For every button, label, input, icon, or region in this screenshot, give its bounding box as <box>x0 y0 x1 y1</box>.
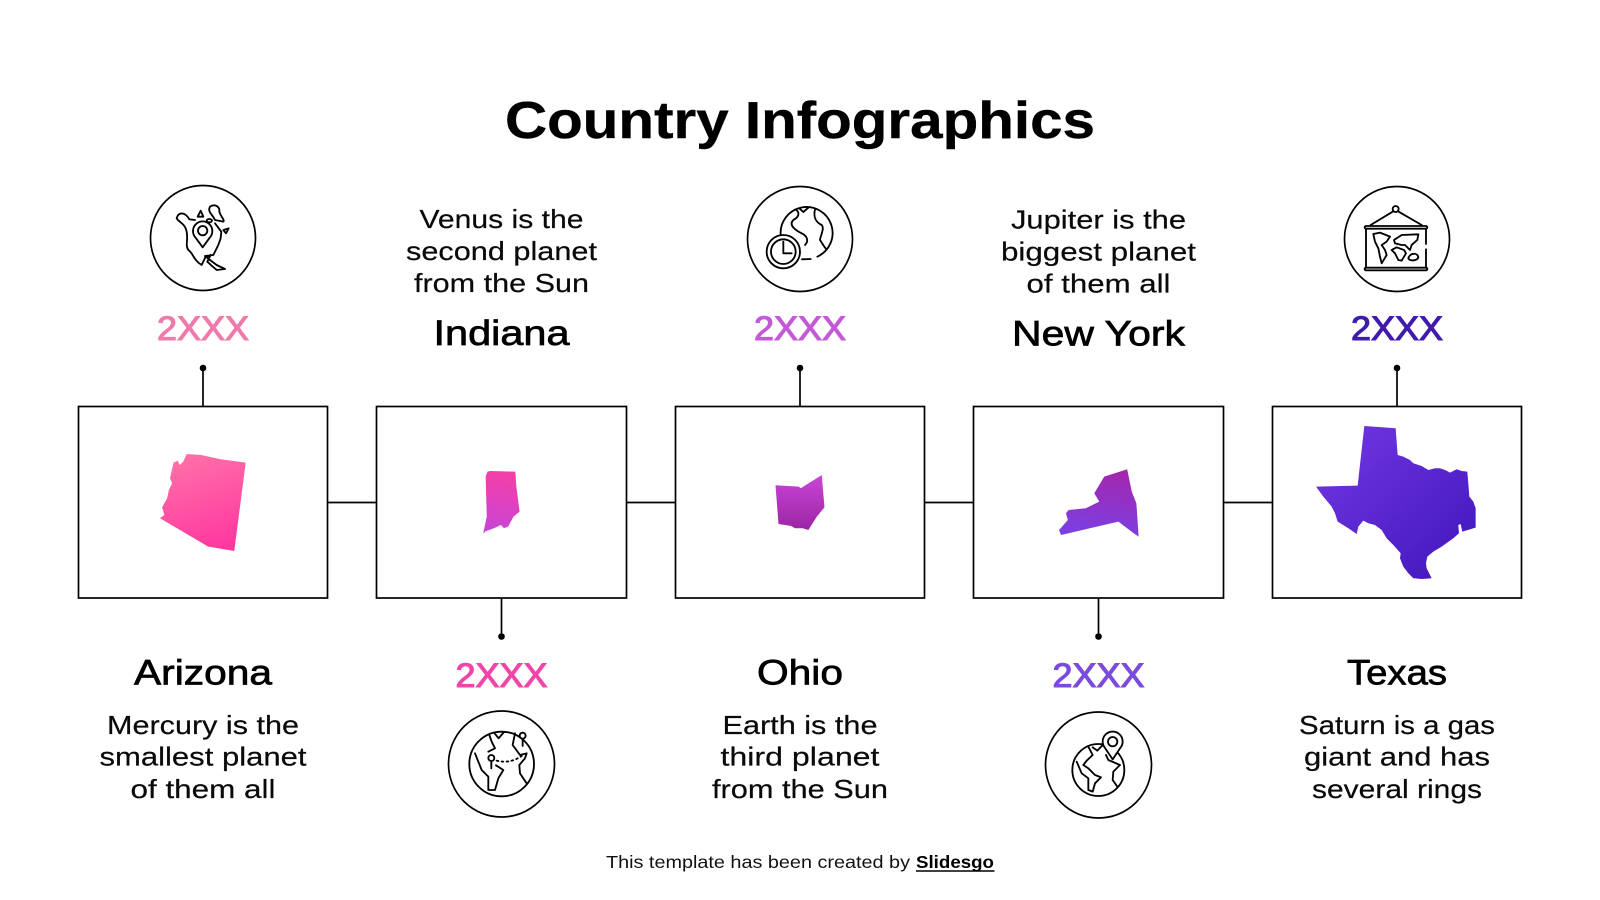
description: Venus is the <box>420 204 584 234</box>
description: Saturn is a gas <box>1299 710 1495 740</box>
map: New York <box>1059 469 1139 537</box>
map box <box>1272 406 1522 598</box>
marker <box>498 598 505 640</box>
description: of them all <box>130 774 276 804</box>
marker <box>200 365 206 406</box>
icon: globe with route between pins <box>448 711 554 817</box>
year: 2XXX <box>1052 657 1144 695</box>
title: Country Infographics <box>505 92 1095 150</box>
description: of them all <box>1026 268 1170 298</box>
map box <box>78 406 328 598</box>
map: Texas <box>1316 426 1476 579</box>
footer credit: Slidesgo <box>916 852 994 872</box>
year: 2XXX <box>1351 310 1443 348</box>
icon: hanging world map <box>1344 186 1450 292</box>
map box <box>676 406 924 598</box>
connector: Ohio to New York <box>924 502 974 504</box>
description: second planet <box>406 236 598 266</box>
description: Mercury is the <box>107 710 299 740</box>
description <box>406 204 598 298</box>
icon: North America with map pin <box>150 186 256 290</box>
description: from the Sun <box>414 268 589 298</box>
icon: globe with clock <box>748 186 852 292</box>
panel: New York <box>974 204 1224 818</box>
map: Indiana <box>483 471 520 534</box>
state name: Texas <box>1347 654 1447 692</box>
state name: Indiana <box>434 314 570 353</box>
description: from the Sun <box>712 774 888 804</box>
state name: Ohio <box>757 654 843 692</box>
description <box>1001 204 1197 298</box>
description: Jupiter is the <box>1011 204 1186 234</box>
description: several rings <box>1312 774 1482 804</box>
marker <box>1095 598 1102 640</box>
year: 2XXX <box>456 657 548 695</box>
description: biggest planet <box>1001 236 1197 266</box>
connector: Indiana to Ohio <box>626 502 676 504</box>
year: 2XXX <box>754 310 846 348</box>
panel: Ohio <box>676 186 924 804</box>
panel: Texas <box>1272 186 1522 804</box>
panel: Arizona <box>78 186 328 804</box>
description: Earth is the <box>722 710 878 740</box>
description <box>1299 710 1495 804</box>
map: Arizona <box>160 454 246 551</box>
map box <box>376 406 626 598</box>
year: 2XXX <box>157 310 249 348</box>
description: third planet <box>720 742 880 772</box>
description: giant and has <box>1304 742 1490 772</box>
connector: New York to Texas <box>1223 502 1273 504</box>
state name: New York <box>1012 314 1186 354</box>
map: Ohio <box>775 475 824 530</box>
marker <box>797 365 803 406</box>
footer credit <box>606 852 994 872</box>
state name: Arizona <box>134 654 273 692</box>
connector: Arizona to Indiana <box>327 502 377 504</box>
icon: globe with location pin <box>1046 712 1152 818</box>
map box <box>974 406 1224 598</box>
footer credit: This template has been created by <box>606 852 910 872</box>
panel: Indiana <box>376 204 626 817</box>
description <box>712 710 888 804</box>
marker <box>1394 365 1400 406</box>
description: smallest planet <box>100 742 307 772</box>
description <box>100 710 307 804</box>
